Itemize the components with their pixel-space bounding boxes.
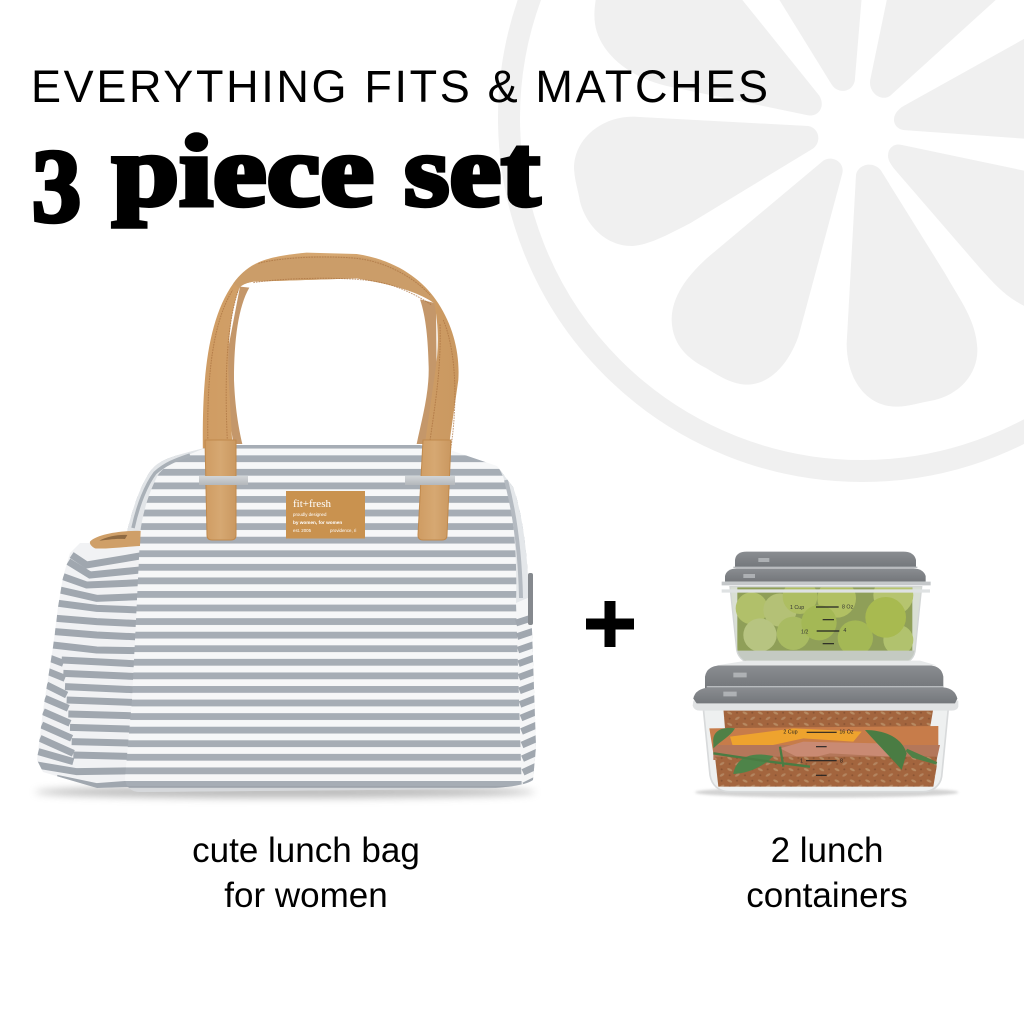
right side panel stripes	[516, 604, 536, 784]
left front strap	[205, 440, 236, 540]
left gusset	[125, 448, 205, 534]
heading: everything fits and matches: EVERYTHING FITS & MATCHES	[31, 61, 768, 112]
small measure marks: 4	[843, 628, 846, 634]
large measure marks: 16 Oz	[839, 730, 854, 736]
bag ground shadow	[35, 786, 535, 798]
large measure marks	[783, 730, 854, 775]
container shadow	[695, 787, 958, 798]
brand label patch: est. 2005	[293, 528, 312, 533]
large measure marks: 8	[840, 759, 843, 765]
small measure marks: 8 Oz	[842, 604, 854, 610]
product: lunch containers	[693, 552, 958, 798]
caption: lunch bag: for women	[224, 876, 388, 915]
caption: lunch bag: cute lunch bag	[192, 831, 420, 870]
bag handles	[203, 253, 459, 473]
large measure marks: 1	[800, 759, 803, 765]
right gusset	[500, 470, 528, 603]
bottom edge shade	[128, 786, 512, 792]
brand label patch: providence, ri	[330, 528, 356, 533]
large container	[693, 661, 958, 792]
lower segments	[574, 117, 977, 407]
heading: 3 piece set: 3	[32, 129, 81, 244]
bag body	[120, 440, 540, 795]
brand label patch: fit+fresh	[293, 498, 331, 510]
pocket binding	[90, 531, 141, 549]
brand label patch: proudly designed	[293, 512, 327, 517]
right metal clip	[405, 476, 455, 485]
side pocket	[37, 543, 140, 788]
heading: 3 piece set	[32, 115, 540, 244]
left metal clip	[199, 476, 248, 485]
grapes	[730, 587, 921, 661]
brand label patch	[286, 491, 365, 538]
product: lunch bag	[30, 253, 540, 798]
zipper pull	[528, 573, 533, 625]
slice rim	[509, 0, 1024, 471]
small container	[722, 552, 931, 665]
heading: 3 piece set: piece	[112, 115, 374, 228]
small measure marks	[790, 604, 854, 644]
brand label patch: by women, for women	[293, 520, 342, 525]
caption: containers: containers	[746, 876, 908, 915]
small measure marks: 1 Cup	[790, 605, 804, 611]
large measure marks: 2 Cup	[783, 730, 798, 736]
sandwich	[703, 703, 948, 792]
large lid	[693, 661, 958, 711]
plus sign	[586, 601, 634, 647]
right front strap	[418, 440, 451, 540]
upper and right segments	[594, 0, 1024, 312]
small lid	[722, 552, 931, 593]
small measure marks: 1/2	[801, 629, 808, 635]
watermark: citrus slice	[509, 0, 1024, 471]
caption: containers: 2 lunch	[771, 831, 883, 870]
heading: 3 piece set: set	[404, 115, 540, 228]
